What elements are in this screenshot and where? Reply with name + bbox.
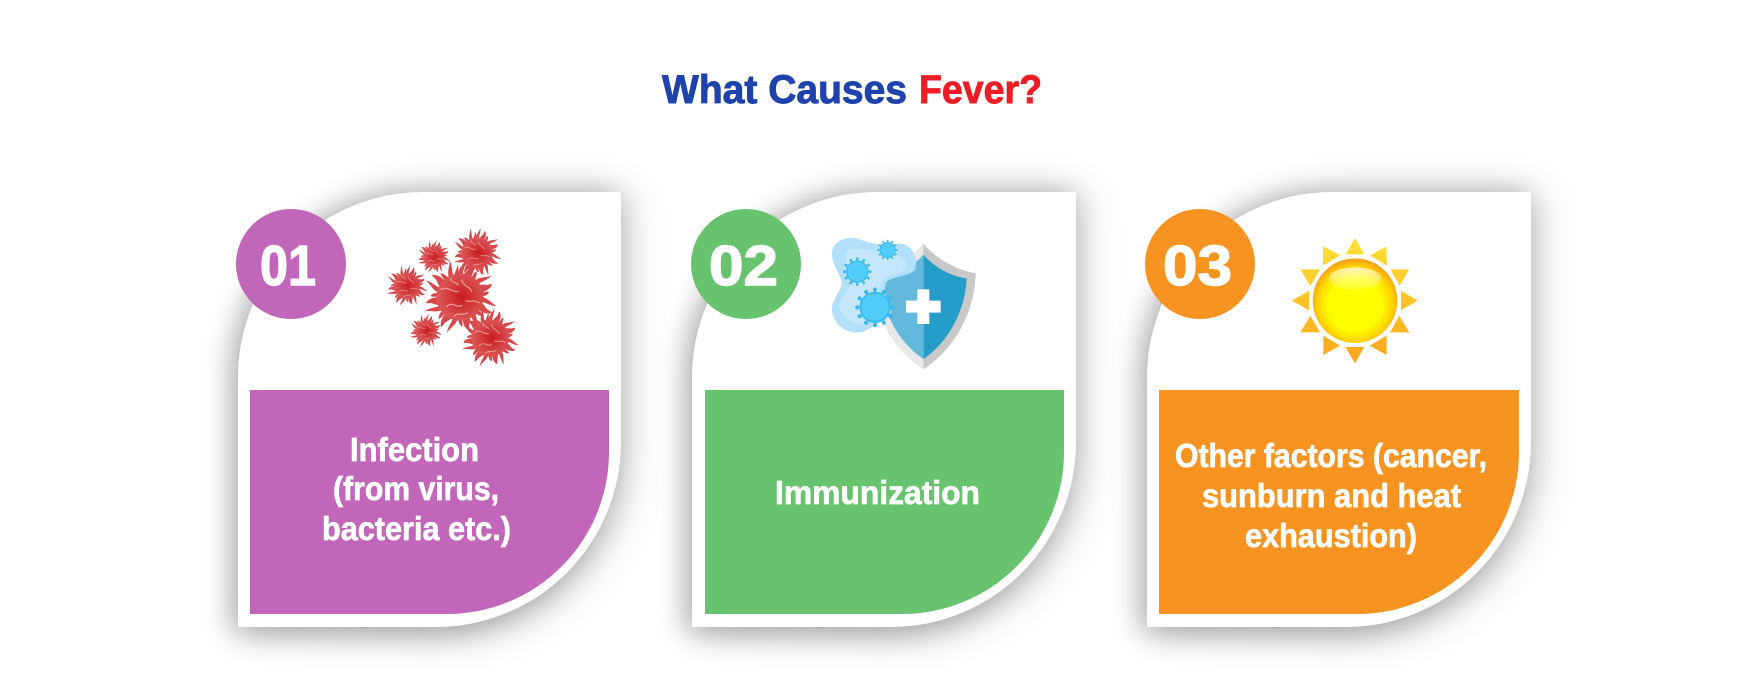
text: infection: Infection <box>350 431 479 468</box>
icon: shield and viruses <box>832 238 976 369</box>
badge: 03: 03 <box>1163 234 1232 298</box>
label box: infection <box>250 390 609 614</box>
badge: 03 <box>1145 209 1255 319</box>
badge: 01: 01 <box>260 234 316 298</box>
icon: sun <box>1292 238 1418 363</box>
card: infection <box>238 192 621 627</box>
panel: other factors <box>1141 192 1541 637</box>
text: other factors: exhaustion) <box>1245 517 1417 554</box>
text: other factors <box>1175 437 1487 554</box>
title <box>662 68 1042 112</box>
text: infection: bacteria etc.) <box>322 510 511 547</box>
card: other factors <box>1147 192 1531 627</box>
text: other factors: sunburn and heat <box>1202 477 1461 514</box>
text: immunization: Immunization <box>775 474 980 511</box>
title: What Causes <box>662 68 907 112</box>
badge: 02: 02 <box>709 234 778 298</box>
text: infection: (from virus, <box>333 470 499 507</box>
panel: immunization <box>686 192 1086 637</box>
badge: 01 <box>236 209 346 319</box>
icon: virus cluster <box>386 228 521 368</box>
card: immunization <box>692 192 1076 627</box>
badge: 02 <box>691 209 801 319</box>
text: infection <box>322 431 511 547</box>
panel: infection <box>232 192 631 637</box>
text: other factors: Other factors (cancer, <box>1175 437 1487 474</box>
label box: other factors <box>1159 390 1519 614</box>
title: Fever? <box>919 68 1042 112</box>
label box: immunization <box>705 390 1064 614</box>
